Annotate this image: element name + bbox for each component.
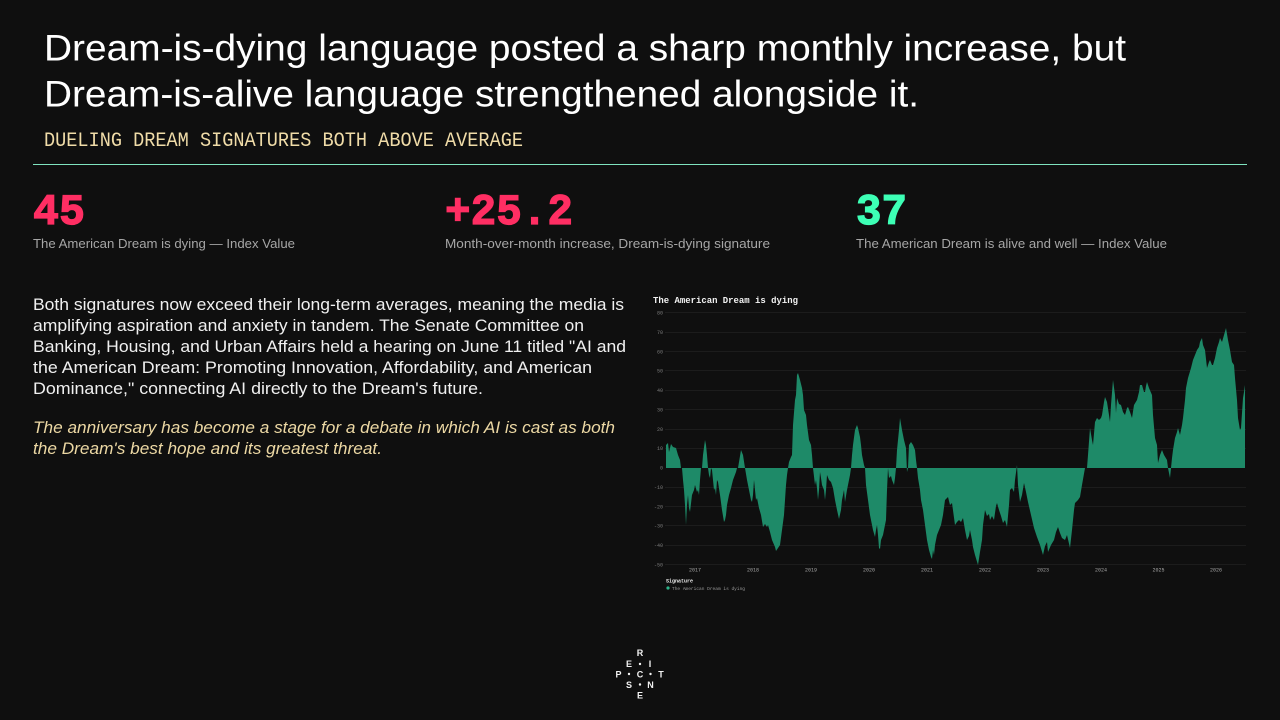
y axis labels: -50 [654, 562, 663, 568]
y axis labels: -40 [654, 543, 663, 549]
y axis labels: 10 [657, 446, 663, 452]
title [44, 28, 1127, 114]
body paragraph: Banking, Housing, and Urban Affairs held a hearing on June 11 titled "AI and [33, 337, 626, 356]
legend: The American Dream is dying [672, 586, 745, 592]
italic takeaway: the Dream's best hope and its greatest threat. [33, 439, 382, 458]
x axis labels: 2019 [805, 568, 817, 574]
stat: alive index value: The American Dream is alive and well — Index Value [856, 237, 1167, 251]
y axis labels: 70 [657, 330, 663, 336]
x axis labels: 2024 [1095, 568, 1107, 574]
stat: dying index value: The American Dream is dying — Index Value [33, 237, 295, 251]
body paragraph: the American Dream: Promoting Innovation, Affordability, and American [33, 358, 592, 377]
y axis labels: -20 [654, 504, 663, 510]
x axis labels [689, 568, 1222, 574]
y axis labels [654, 310, 663, 568]
stat: dying index value [33, 188, 295, 251]
logo: R [637, 648, 644, 658]
title: Dream-is-alive language strengthened alongside it. [44, 74, 919, 114]
stat: month-over-month increase: +25.2 [445, 188, 573, 238]
x axis labels: 2021 [921, 568, 933, 574]
stat: alive index value: 37 [856, 188, 907, 238]
body paragraph: Dominance," connecting AI directly to the Dream's future. [33, 379, 483, 398]
stat: month-over-month increase [445, 188, 770, 251]
x axis labels: 2025 [1152, 568, 1165, 574]
stat: dying index value: 45 [33, 188, 85, 238]
y axis labels: 80 [657, 310, 663, 316]
body paragraph: amplifying aspiration and anxiety in tandem. The Senate Committee on [33, 316, 584, 335]
title: Dream-is-dying language posted a sharp monthly increase, but [44, 28, 1127, 68]
stat: month-over-month increase: Month-over-month increase, Dream-is-dying signature [445, 237, 770, 251]
x axis labels: 2023 [1037, 568, 1049, 574]
logo: S [626, 680, 632, 690]
logo: E [637, 690, 643, 700]
logo: T [658, 670, 664, 680]
x axis labels: 2020 [863, 568, 875, 574]
x axis labels: 2017 [689, 568, 701, 574]
subtitle: DUELING DREAM SIGNATURES BOTH ABOVE AVERAGE [44, 130, 523, 153]
logo: P [615, 670, 622, 680]
y axis labels: 0 [660, 466, 663, 472]
logo [615, 648, 664, 700]
area series [666, 328, 1245, 565]
logo: E [626, 659, 632, 669]
x axis labels: 2026 [1210, 568, 1222, 574]
y axis labels: 20 [657, 427, 663, 433]
y axis labels: 40 [657, 388, 663, 394]
legend: Signature [666, 578, 693, 584]
logo: N [647, 680, 654, 690]
stat: alive index value [856, 188, 1167, 251]
y axis labels: -30 [654, 524, 663, 530]
logo: I [649, 659, 651, 669]
italic takeaway: The anniversary has become a stage for a debate in which AI is cast as both [33, 418, 615, 437]
area chart: The American Dream is dying [653, 295, 1246, 592]
chart title: The American Dream is dying [653, 295, 798, 306]
body paragraph [33, 295, 626, 398]
x axis labels: 2018 [747, 568, 759, 574]
x axis labels: 2022 [979, 568, 991, 574]
y axis labels: 30 [657, 408, 663, 414]
italic takeaway [33, 418, 615, 458]
y axis labels: 60 [657, 350, 663, 356]
y axis labels: -10 [654, 485, 663, 491]
logo: C [637, 670, 644, 680]
body paragraph: Both signatures now exceed their long-term averages, meaning the media is [33, 295, 624, 314]
legend [666, 578, 745, 592]
y axis labels: 50 [657, 368, 663, 374]
